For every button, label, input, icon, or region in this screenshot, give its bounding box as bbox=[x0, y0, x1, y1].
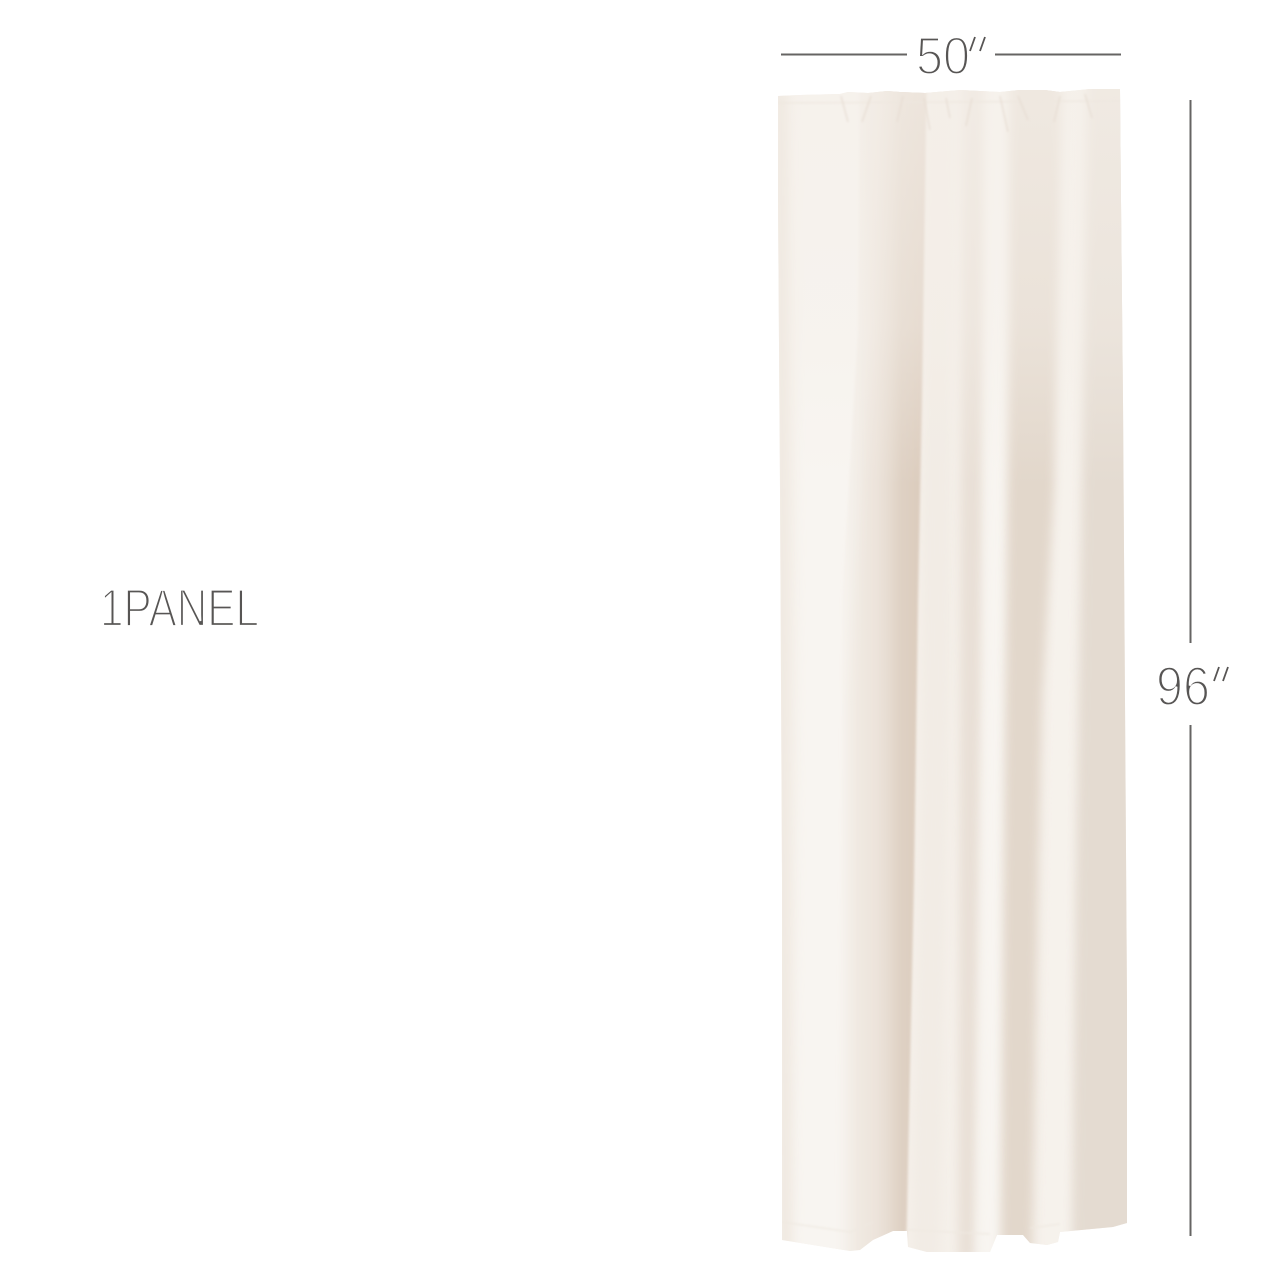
soft edge of left hem bbox=[776, 90, 790, 1260]
fold: subtle shade centre bbox=[958, 60, 985, 1260]
width dimension: 50 inches bbox=[781, 27, 1121, 86]
label: 1 PANEL: 1PANEL bbox=[100, 579, 259, 638]
curtain panel bbox=[770, 60, 1140, 1260]
height dimension: 96 inches bbox=[1156, 100, 1228, 1236]
bottom hem bbox=[782, 1222, 1060, 1234]
fold: bright strip right bbox=[1040, 60, 1082, 1260]
fold: shadow right edge bbox=[1070, 104, 1127, 1231]
top softening of folds bbox=[868, 89, 1122, 420]
rod pocket gathers bbox=[841, 96, 1088, 130]
fold: deep shadow centre-left bbox=[854, 91, 926, 1250]
height dimension: 96 inches: 96 bbox=[1156, 655, 1210, 717]
fold: bright strip centre bbox=[978, 60, 1008, 1260]
width dimension: 50 inches: 50 bbox=[916, 27, 970, 86]
fold: light areas bbox=[795, 60, 955, 1260]
fold: shadow centre-right bbox=[1001, 60, 1062, 1260]
